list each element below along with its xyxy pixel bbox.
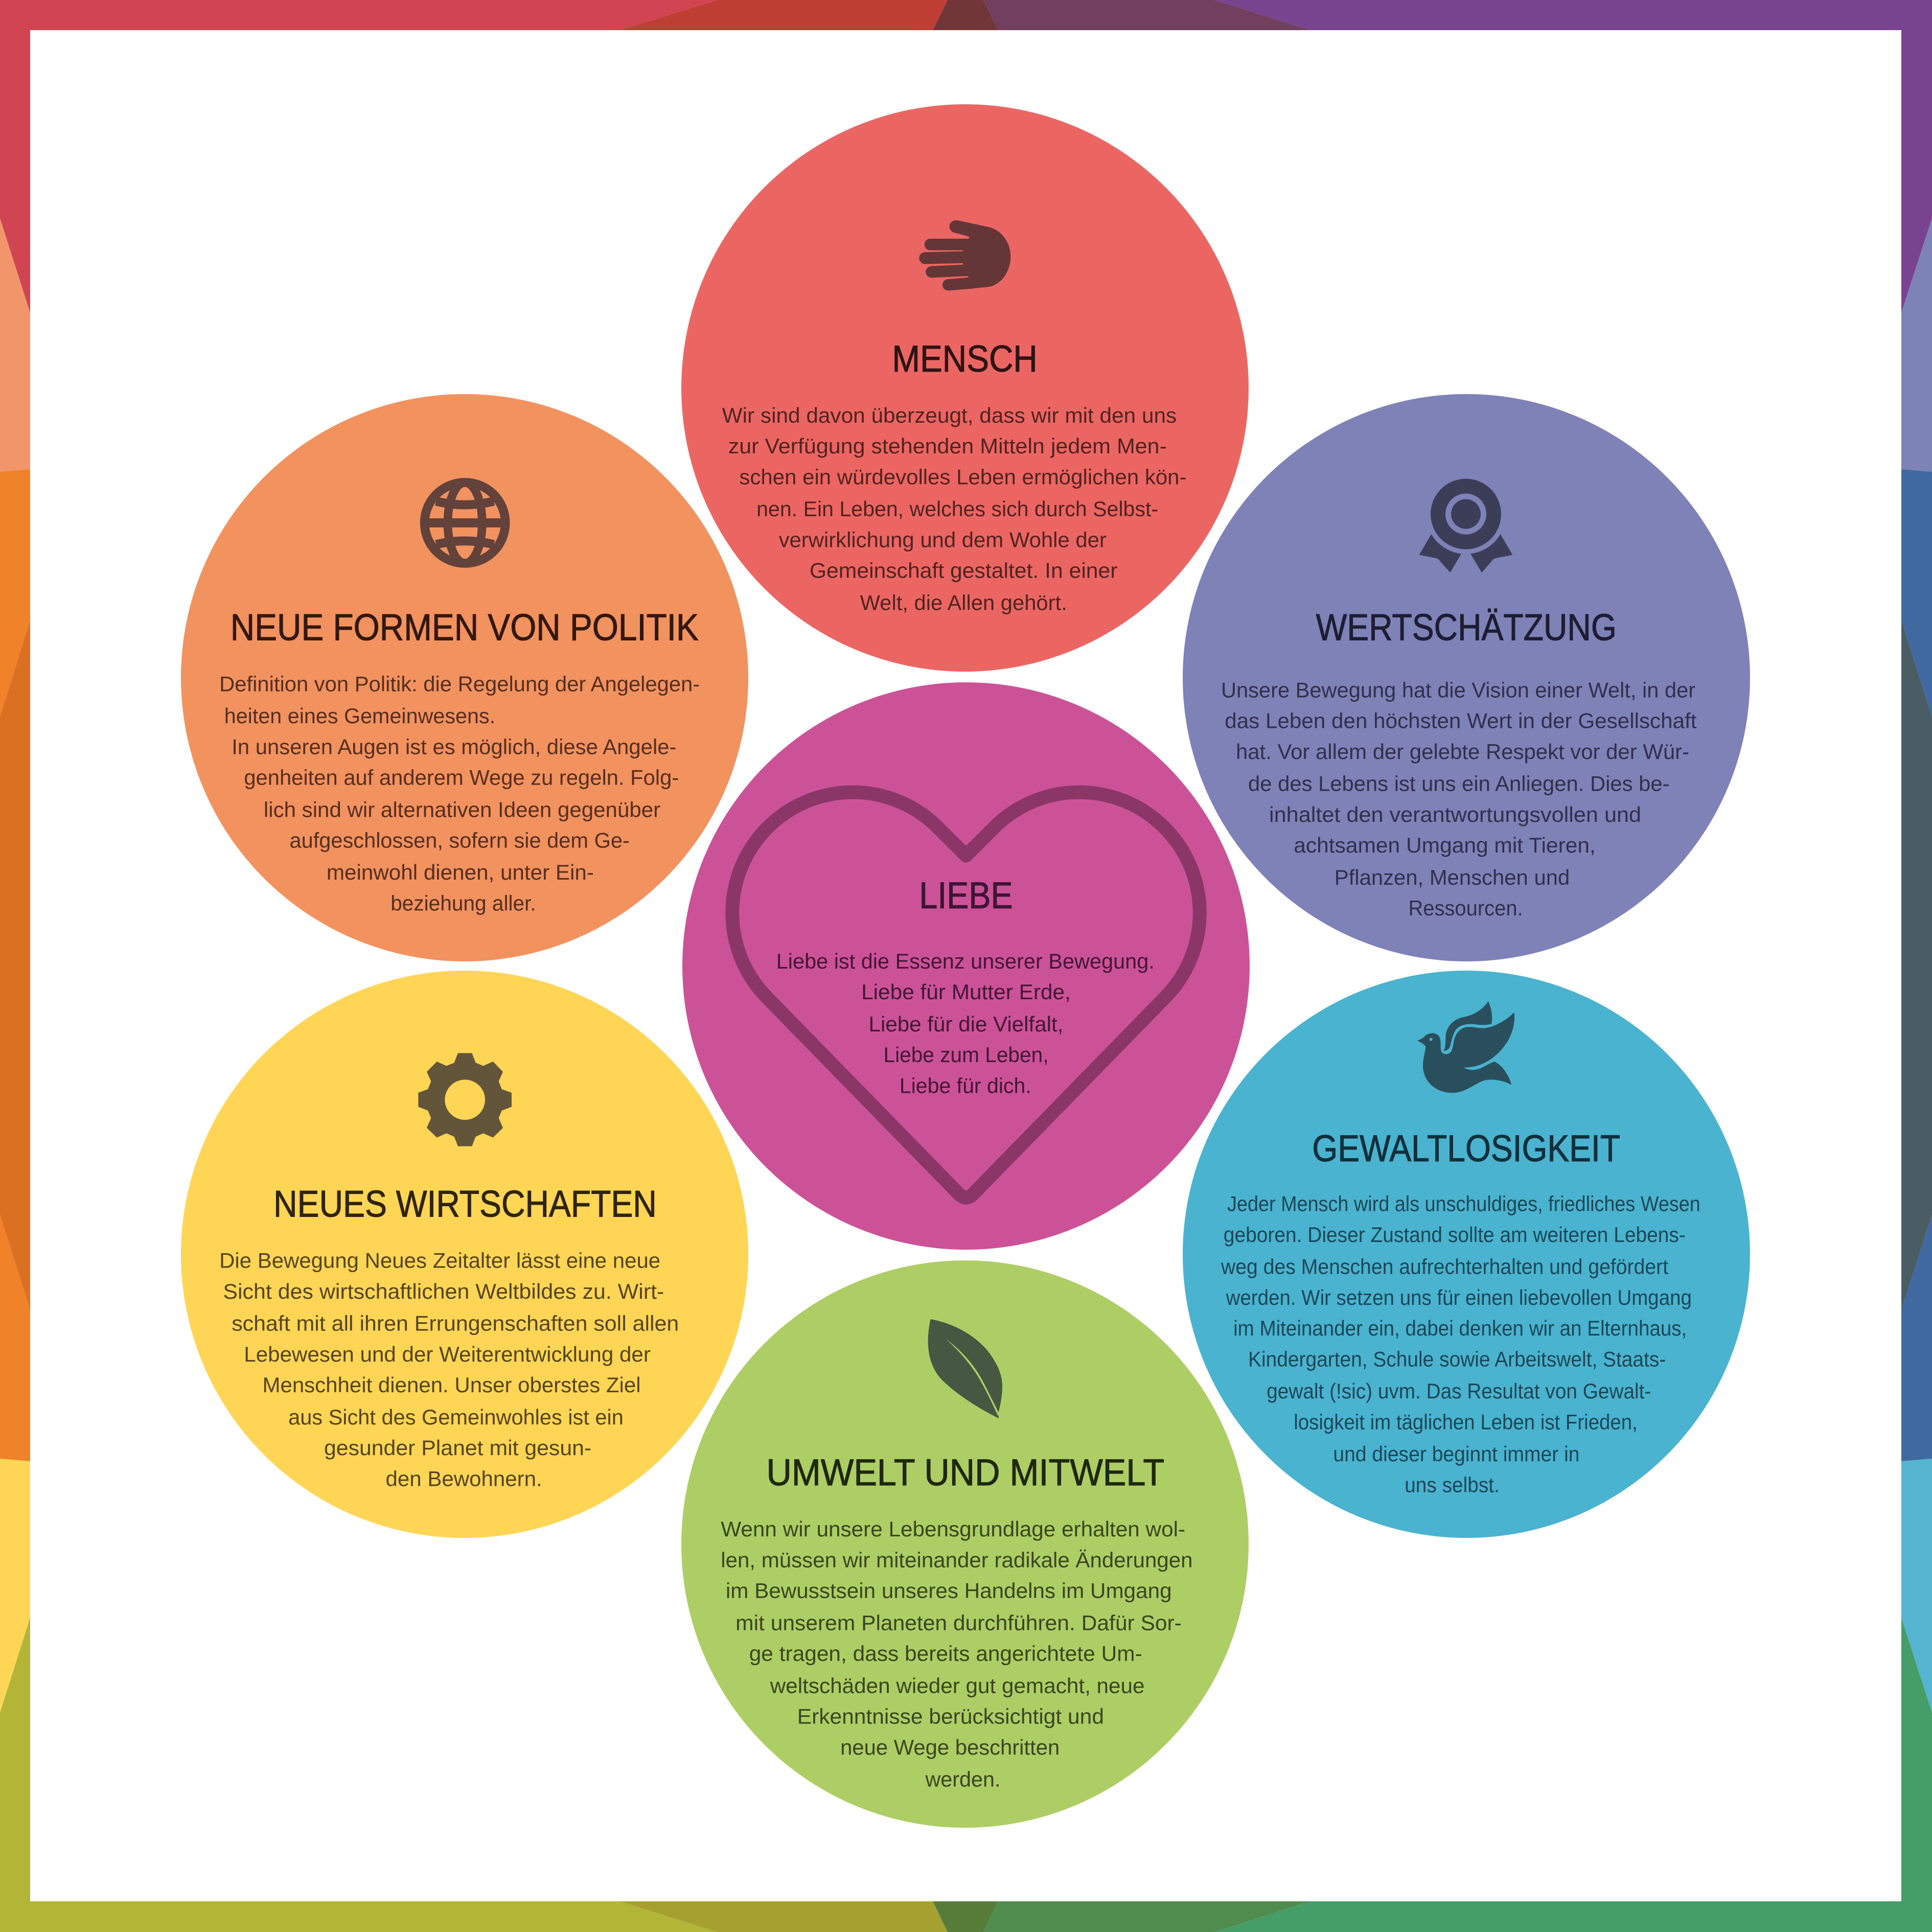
text: Politik body: heiten eines Gemeinwesens. xyxy=(224,704,495,728)
heading: Mensch: MENSCH xyxy=(892,337,1038,380)
text: Wertschätzung body: inhaltet den verantwortungsvollen und xyxy=(1269,802,1641,826)
text: Umwelt body: ge tragen, dass bereits angerichtete Um- xyxy=(749,1642,1142,1666)
text: Mensch body: zur Verfügung stehenden Mitteln jedem Men- xyxy=(728,434,1167,458)
text: Mensch body: nen. Ein Leben, welches sich durch Selbst- xyxy=(756,497,1158,521)
panel: Liebe xyxy=(682,682,1250,1250)
text: Mensch body xyxy=(722,403,1187,614)
text: Wirtschaften body xyxy=(219,1249,679,1490)
icon: hand xyxy=(925,220,1010,290)
icon: heart outline xyxy=(732,792,1200,1198)
text: Wertschätzung body xyxy=(1221,678,1697,920)
text: Liebe body: Liebe zum Leben, xyxy=(883,1043,1049,1067)
text: Gewaltlosigkeit body: losigkeit im täglichen Leben ist Frieden, xyxy=(1294,1410,1638,1434)
text: Politik body: genheiten auf anderem Wege zu regeln. Folg- xyxy=(244,766,679,790)
text: Mensch body: verwirklichung und dem Wohle der xyxy=(779,527,1107,551)
text: Liebe body: Liebe für dich. xyxy=(900,1073,1031,1097)
text: Politik body: beziehung aller. xyxy=(390,891,536,915)
text: Wirtschaften body: den Bewohnern. xyxy=(386,1466,542,1490)
text: Umwelt body: weltschäden wieder gut gemacht, neue xyxy=(770,1673,1145,1697)
text: Wertschätzung body: Unsere Bewegung hat die Vision einer Welt, in der xyxy=(1221,678,1695,702)
text: Wirtschaften body: Lebewesen und der Weiterentwicklung der xyxy=(244,1342,651,1366)
text: Gewaltlosigkeit body xyxy=(1221,1192,1700,1497)
text: Umwelt body: im Bewusstsein unseres Handelns im Umgang xyxy=(726,1579,1172,1603)
heading: Neues Wirtschaften: NEUES WIRTSCHAFTEN xyxy=(273,1183,657,1225)
text: Politik body: lich sind wir alternativen Ideen gegenüber xyxy=(264,797,660,821)
text: Wirtschaften body: schaft mit all ihren Errungenschaften soll allen xyxy=(232,1312,679,1336)
text: Politik body: meinwohl dienen, unter Ein- xyxy=(327,860,594,884)
icon: award rosette xyxy=(1419,479,1512,572)
text: Wertschätzung body: de des Lebens ist uns ein Anliegen. Dies be- xyxy=(1248,772,1670,796)
text: Politik body: aufgeschlossen, sofern sie dem Ge- xyxy=(290,829,630,853)
text: Wirtschaften body: Die Bewegung Neues Zeitalter lässt eine neue xyxy=(219,1249,660,1273)
text: Liebe body: Liebe ist die Essenz unserer Bewegung. xyxy=(776,949,1155,973)
text: Wirtschaften body: Sicht des wirtschaftlichen Weltbildes zu. Wirt- xyxy=(223,1279,664,1303)
panel: Wertschätzung xyxy=(1183,394,1750,961)
text: Gewaltlosigkeit body: und dieser beginnt immer in xyxy=(1333,1442,1580,1466)
text: Umwelt body xyxy=(721,1517,1193,1791)
text: Gewaltlosigkeit body: Kindergarten, Schule sowie Arbeitswelt, Staats- xyxy=(1248,1347,1666,1371)
heading: Umwelt und Mitwelt: UMWELT UND MITWELT xyxy=(766,1451,1164,1493)
icon: globe xyxy=(425,482,505,563)
text: Wirtschaften body: Menschheit dienen. Unser oberstes Ziel xyxy=(262,1373,641,1397)
text: Wirtschaften body: gesunder Planet mit gesun- xyxy=(324,1436,591,1460)
icon: gear xyxy=(418,1053,512,1146)
text: Wertschätzung body: hat. Vor allem der gelebte Respekt vor der Wür- xyxy=(1236,740,1689,764)
panel: Gewaltlosigkeit xyxy=(1183,971,1750,1538)
text: Liebe body xyxy=(776,949,1155,1097)
text: Politik body: Definition von Politik: die Regelung der Angelegen- xyxy=(219,672,700,696)
text: Mensch body: Wir sind davon überzeugt, dass wir mit den uns xyxy=(722,403,1177,427)
panel: Umwelt und Mitwelt xyxy=(681,1260,1249,1828)
text: Umwelt body: Wenn wir unsere Lebensgrundlage erhalten wol- xyxy=(721,1517,1185,1541)
text: Wertschätzung body: Pflanzen, Menschen und xyxy=(1335,865,1570,889)
text: Gewaltlosigkeit body: weg des Menschen aufrechterhalten und gefördert xyxy=(1221,1255,1668,1279)
text: Politik body: In unseren Augen ist es möglich, diese Angele- xyxy=(232,734,676,758)
text: Gewaltlosigkeit body: uns selbst. xyxy=(1405,1473,1500,1497)
heading: Liebe: LIEBE xyxy=(919,874,1013,916)
text: Wertschätzung body: Ressourcen. xyxy=(1408,896,1523,920)
text: Gewaltlosigkeit body: geboren. Dieser Zustand sollte am weiteren Lebens- xyxy=(1224,1223,1686,1247)
icon: leaf xyxy=(928,1319,1002,1418)
text: Gewaltlosigkeit body: Jeder Mensch wird als unschuldiges, friedliches Wesen xyxy=(1227,1192,1700,1216)
text: Wertschätzung body: das Leben den höchsten Wert in der Gesellschaft xyxy=(1225,709,1697,733)
text: Wirtschaften body: aus Sicht des Gemeinwohles ist ein xyxy=(288,1405,624,1429)
heading: Gewaltlosigkeit: GEWALTLOSIGKEIT xyxy=(1312,1127,1620,1169)
text: Politik body xyxy=(219,672,700,915)
text: Umwelt body: mit unserem Planeten durchführen. Dafür Sor- xyxy=(735,1611,1182,1635)
panel: Neues Wirtschaften xyxy=(181,971,748,1538)
text: Gewaltlosigkeit body: gewalt (!sic) uvm. Das Resultat von Gewalt- xyxy=(1267,1379,1651,1403)
text: Umwelt body: Erkenntnisse berücksichtigt und xyxy=(797,1705,1104,1729)
panel: Neue Formen von Politik xyxy=(181,394,748,961)
text: Mensch body: schen ein würdevolles Leben ermöglichen kön- xyxy=(739,465,1187,489)
text: Wertschätzung body: achtsamen Umgang mit Tieren, xyxy=(1294,833,1596,857)
text: Liebe body: Liebe für Mutter Erde, xyxy=(861,980,1071,1004)
text: Liebe body: Liebe für die Vielfalt, xyxy=(869,1012,1063,1036)
text: Gewaltlosigkeit body: werden. Wir setzen uns für einen liebevollen Umgang xyxy=(1226,1285,1692,1309)
text: Mensch body: Welt, die Allen gehört. xyxy=(860,590,1067,614)
heading: Neue Formen von Politik: NEUE FORMEN VON POLITIK xyxy=(231,606,699,648)
heading: Wertschätzung: WERTSCHÄTZUNG xyxy=(1316,606,1617,648)
panel: Mensch xyxy=(681,104,1249,672)
icon: dove xyxy=(1417,1001,1514,1093)
text: Umwelt body: werden. xyxy=(925,1767,1000,1791)
text: Mensch body: Gemeinschaft gestaltet. In einer xyxy=(810,559,1118,583)
text: Umwelt body: len, müssen wir miteinander radikale Änderungen xyxy=(721,1548,1193,1572)
text: Umwelt body: neue Wege beschritten xyxy=(840,1735,1060,1759)
text: Gewaltlosigkeit body: im Miteinander ein, dabei denken wir an Elternhaus, xyxy=(1233,1316,1687,1340)
